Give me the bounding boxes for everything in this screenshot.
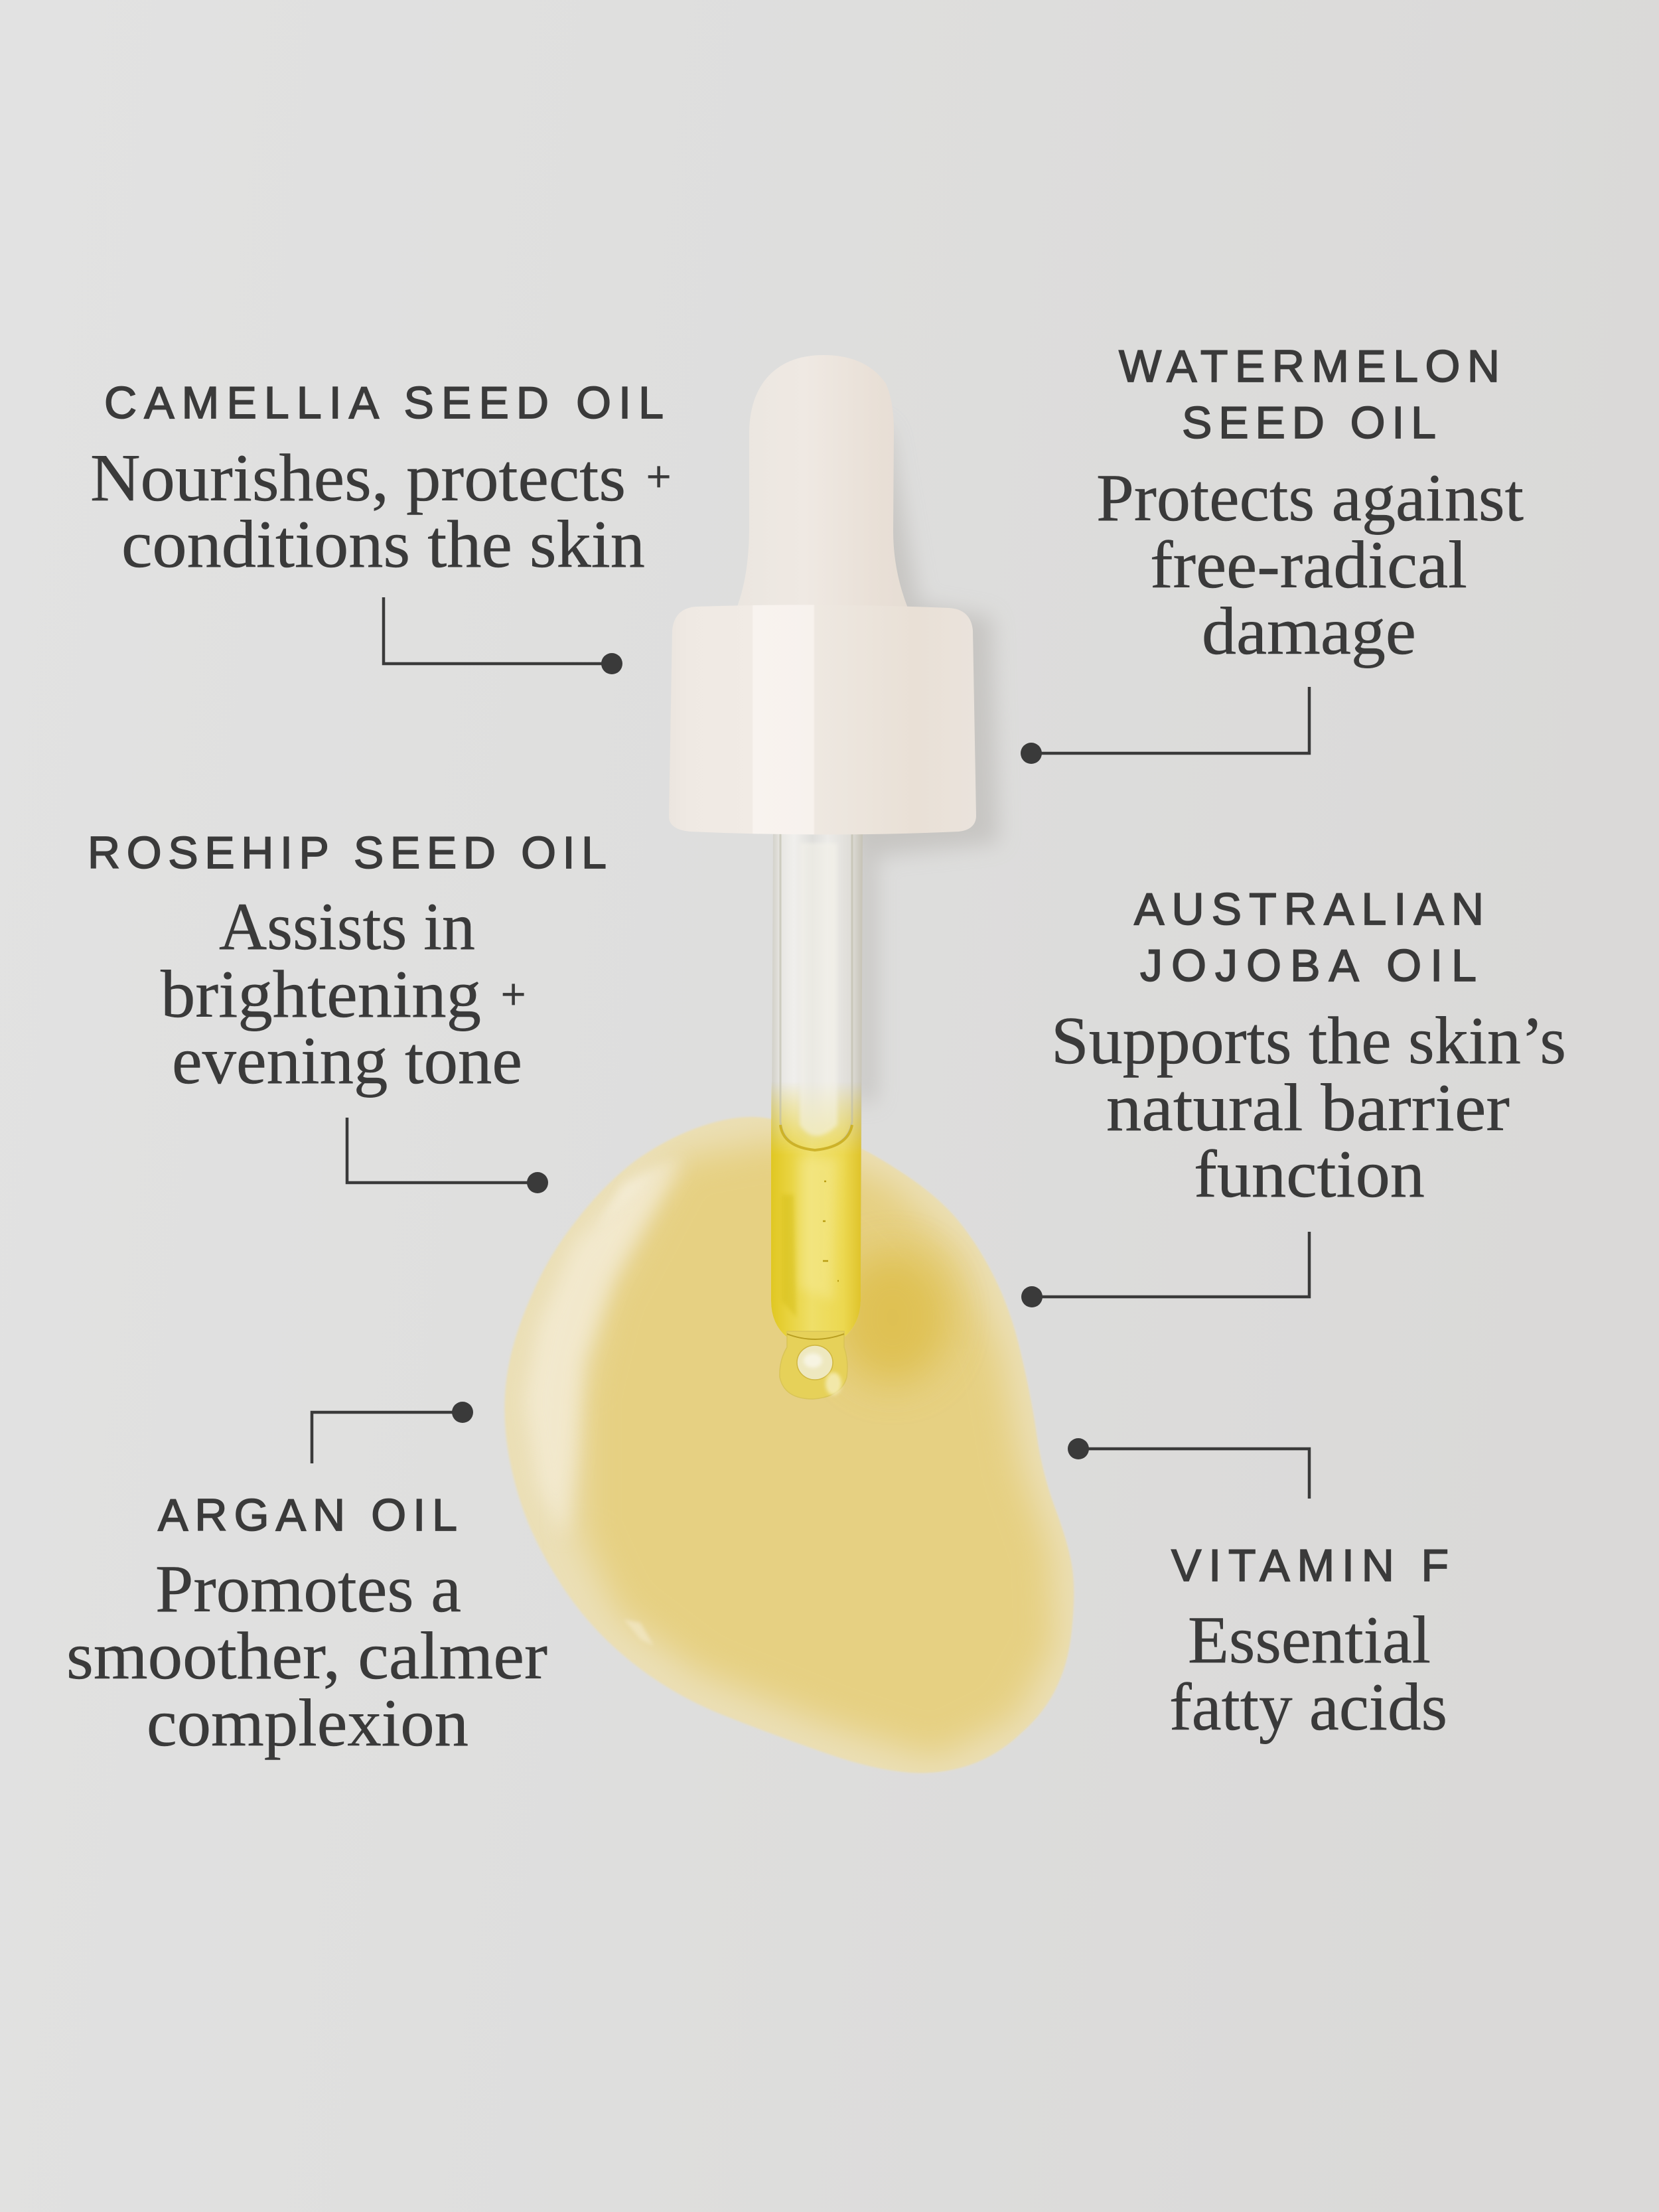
leader line [347, 1118, 548, 1193]
heading: CAMELLIA SEED OIL [104, 378, 664, 428]
description [1169, 1603, 1447, 1745]
description: complexion [147, 1686, 469, 1761]
description: evening tone [172, 1023, 522, 1098]
collar [669, 605, 976, 835]
description: conditions the skin [121, 507, 645, 582]
description: Promotes a [155, 1552, 461, 1627]
description: + [646, 453, 671, 501]
heading: WATERMELON [1119, 341, 1500, 392]
description: damage [1202, 594, 1416, 669]
leader line [1068, 1438, 1309, 1499]
callout: camellia seed oil [90, 378, 671, 674]
dropper shadow [830, 398, 999, 1102]
description: free-radical [1150, 528, 1467, 603]
description: Supports the skin’s [1051, 1003, 1566, 1078]
heading: ROSEHIP SEED OIL [88, 828, 607, 878]
heading: ARGAN OIL [158, 1490, 457, 1540]
callout: argan oil [66, 1402, 547, 1761]
heading [1134, 884, 1484, 991]
callout: rosehip seed oil [88, 828, 607, 1193]
heading: SEED OIL [1182, 398, 1436, 448]
description [1051, 1003, 1566, 1212]
rubber bulb [737, 355, 908, 608]
description: Essential [1188, 1603, 1431, 1678]
oil in tube [771, 1075, 861, 1337]
callout: vitamin f [1068, 1438, 1449, 1745]
glass tip [780, 1331, 847, 1399]
leader line [384, 597, 622, 674]
callout: australian jojoba oil [1021, 884, 1566, 1307]
description [90, 441, 671, 582]
description: brightening [161, 957, 481, 1032]
description: natural barrier [1106, 1070, 1510, 1145]
description: Assists in [219, 889, 475, 964]
description [66, 1552, 547, 1761]
heading: AUSTRALIAN [1134, 884, 1484, 934]
description: fatty acids [1169, 1670, 1447, 1745]
description: function [1194, 1137, 1425, 1212]
oil puddle [504, 1117, 1074, 1773]
leader line [312, 1402, 473, 1463]
heading [1119, 341, 1500, 448]
description: Protects against [1096, 461, 1524, 536]
description [161, 889, 526, 1098]
description: Nourishes, protects [90, 441, 626, 516]
leader line [1021, 687, 1309, 764]
heading: VITAMIN F [1171, 1540, 1449, 1591]
leader line [1021, 1232, 1309, 1307]
description: smoother, calmer [66, 1619, 547, 1694]
dropper [669, 355, 976, 1399]
description [1096, 461, 1524, 669]
description: + [501, 970, 526, 1019]
glass tube [771, 830, 863, 1337]
heading: JOJOBA OIL [1140, 940, 1477, 991]
callout: watermelon seed oil [1021, 341, 1524, 764]
